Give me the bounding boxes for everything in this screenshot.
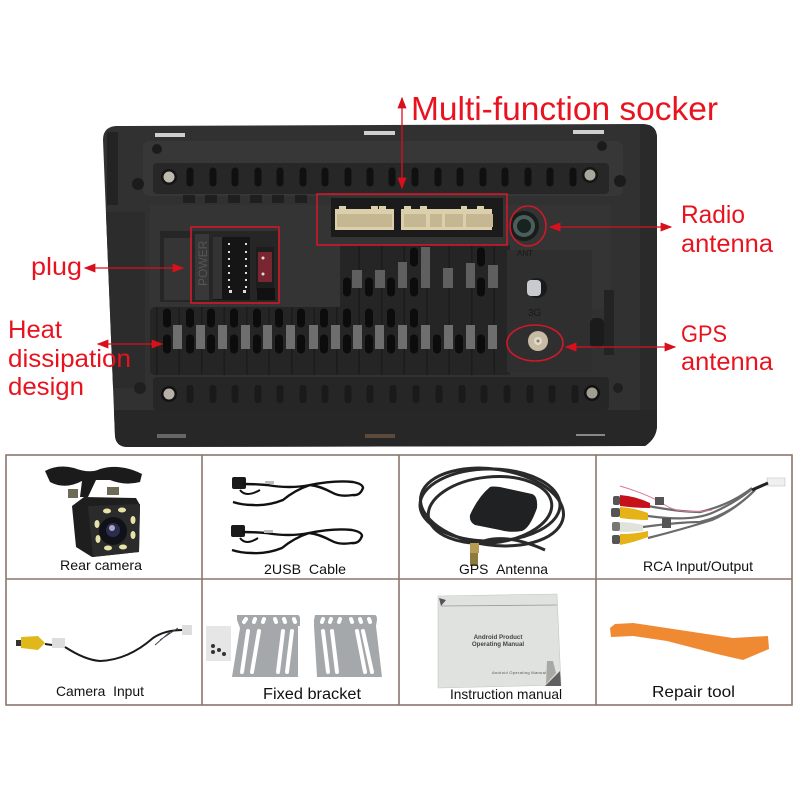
antenna plate [507,250,510,372]
central recess [150,205,610,309]
device rear panel [100,120,660,450]
screws and mounting holes [132,141,626,394]
icon: camera input cable [16,625,192,661]
icon: instruction manual: Android Product [474,634,522,641]
radio antenna port [509,211,539,258]
label: GPS antenna: antenna [681,348,773,376]
label: heat dissipation design: dissipation [8,345,131,373]
3G port: 3G [528,308,542,319]
power connector [160,231,278,302]
caption: GPS antenna: GPS Antenna [459,561,548,577]
icon: instruction manual: Android Operating Manual [492,670,546,675]
caption: repair tool: Repair tool [652,684,735,701]
icon: rear camera [45,467,142,557]
label: radio antenna [681,201,773,258]
icon: 2 USB cables [231,477,363,553]
top clips [155,130,604,137]
caption: rear camera: Rear camera [60,557,142,573]
GPS port [528,331,548,351]
caption: 2USB cable: 2USB Cable [264,561,346,577]
caption: RCA input/output: RCA Input/Output [643,558,753,574]
housing [100,120,660,450]
heat vent fins [150,245,510,375]
label: GPS antenna [681,321,773,376]
icon: orange repair tool [610,623,769,660]
multi-function connector [331,198,503,237]
icon: GPS antenna [415,459,569,566]
icon: RCA cable [611,478,785,545]
label: radio antenna: Radio [681,201,745,229]
power connector: POWER [196,240,210,286]
caption: camera input: Camera Input [56,683,144,699]
radio antenna port: ANT [517,249,533,258]
accessories grid [6,455,792,705]
label: heat dissipation design [8,316,131,401]
3G port [527,278,547,319]
label: GPS antenna: GPS [681,321,727,348]
icon: fixed brackets and screws [206,615,382,677]
red highlight outlines [191,194,563,361]
caption: instruction manual: Instruction manual [450,686,562,702]
icon: instruction manual: Operating Manual [472,641,524,648]
annotation arrows [85,98,675,347]
lower vent plate [153,377,609,438]
label: heat dissipation design: Heat [8,316,62,344]
label: plug: plug [31,253,82,281]
upper plate [143,141,623,196]
small notches [183,195,307,203]
caption: fixed bracket: Fixed bracket [263,686,362,703]
label: radio antenna: antenna [681,230,773,258]
icon: instruction manual [438,594,561,688]
upper vent slots [186,168,576,186]
label: heat dissipation design: design [8,373,84,401]
label: multi-function socket: Multi-function socker [411,90,718,127]
